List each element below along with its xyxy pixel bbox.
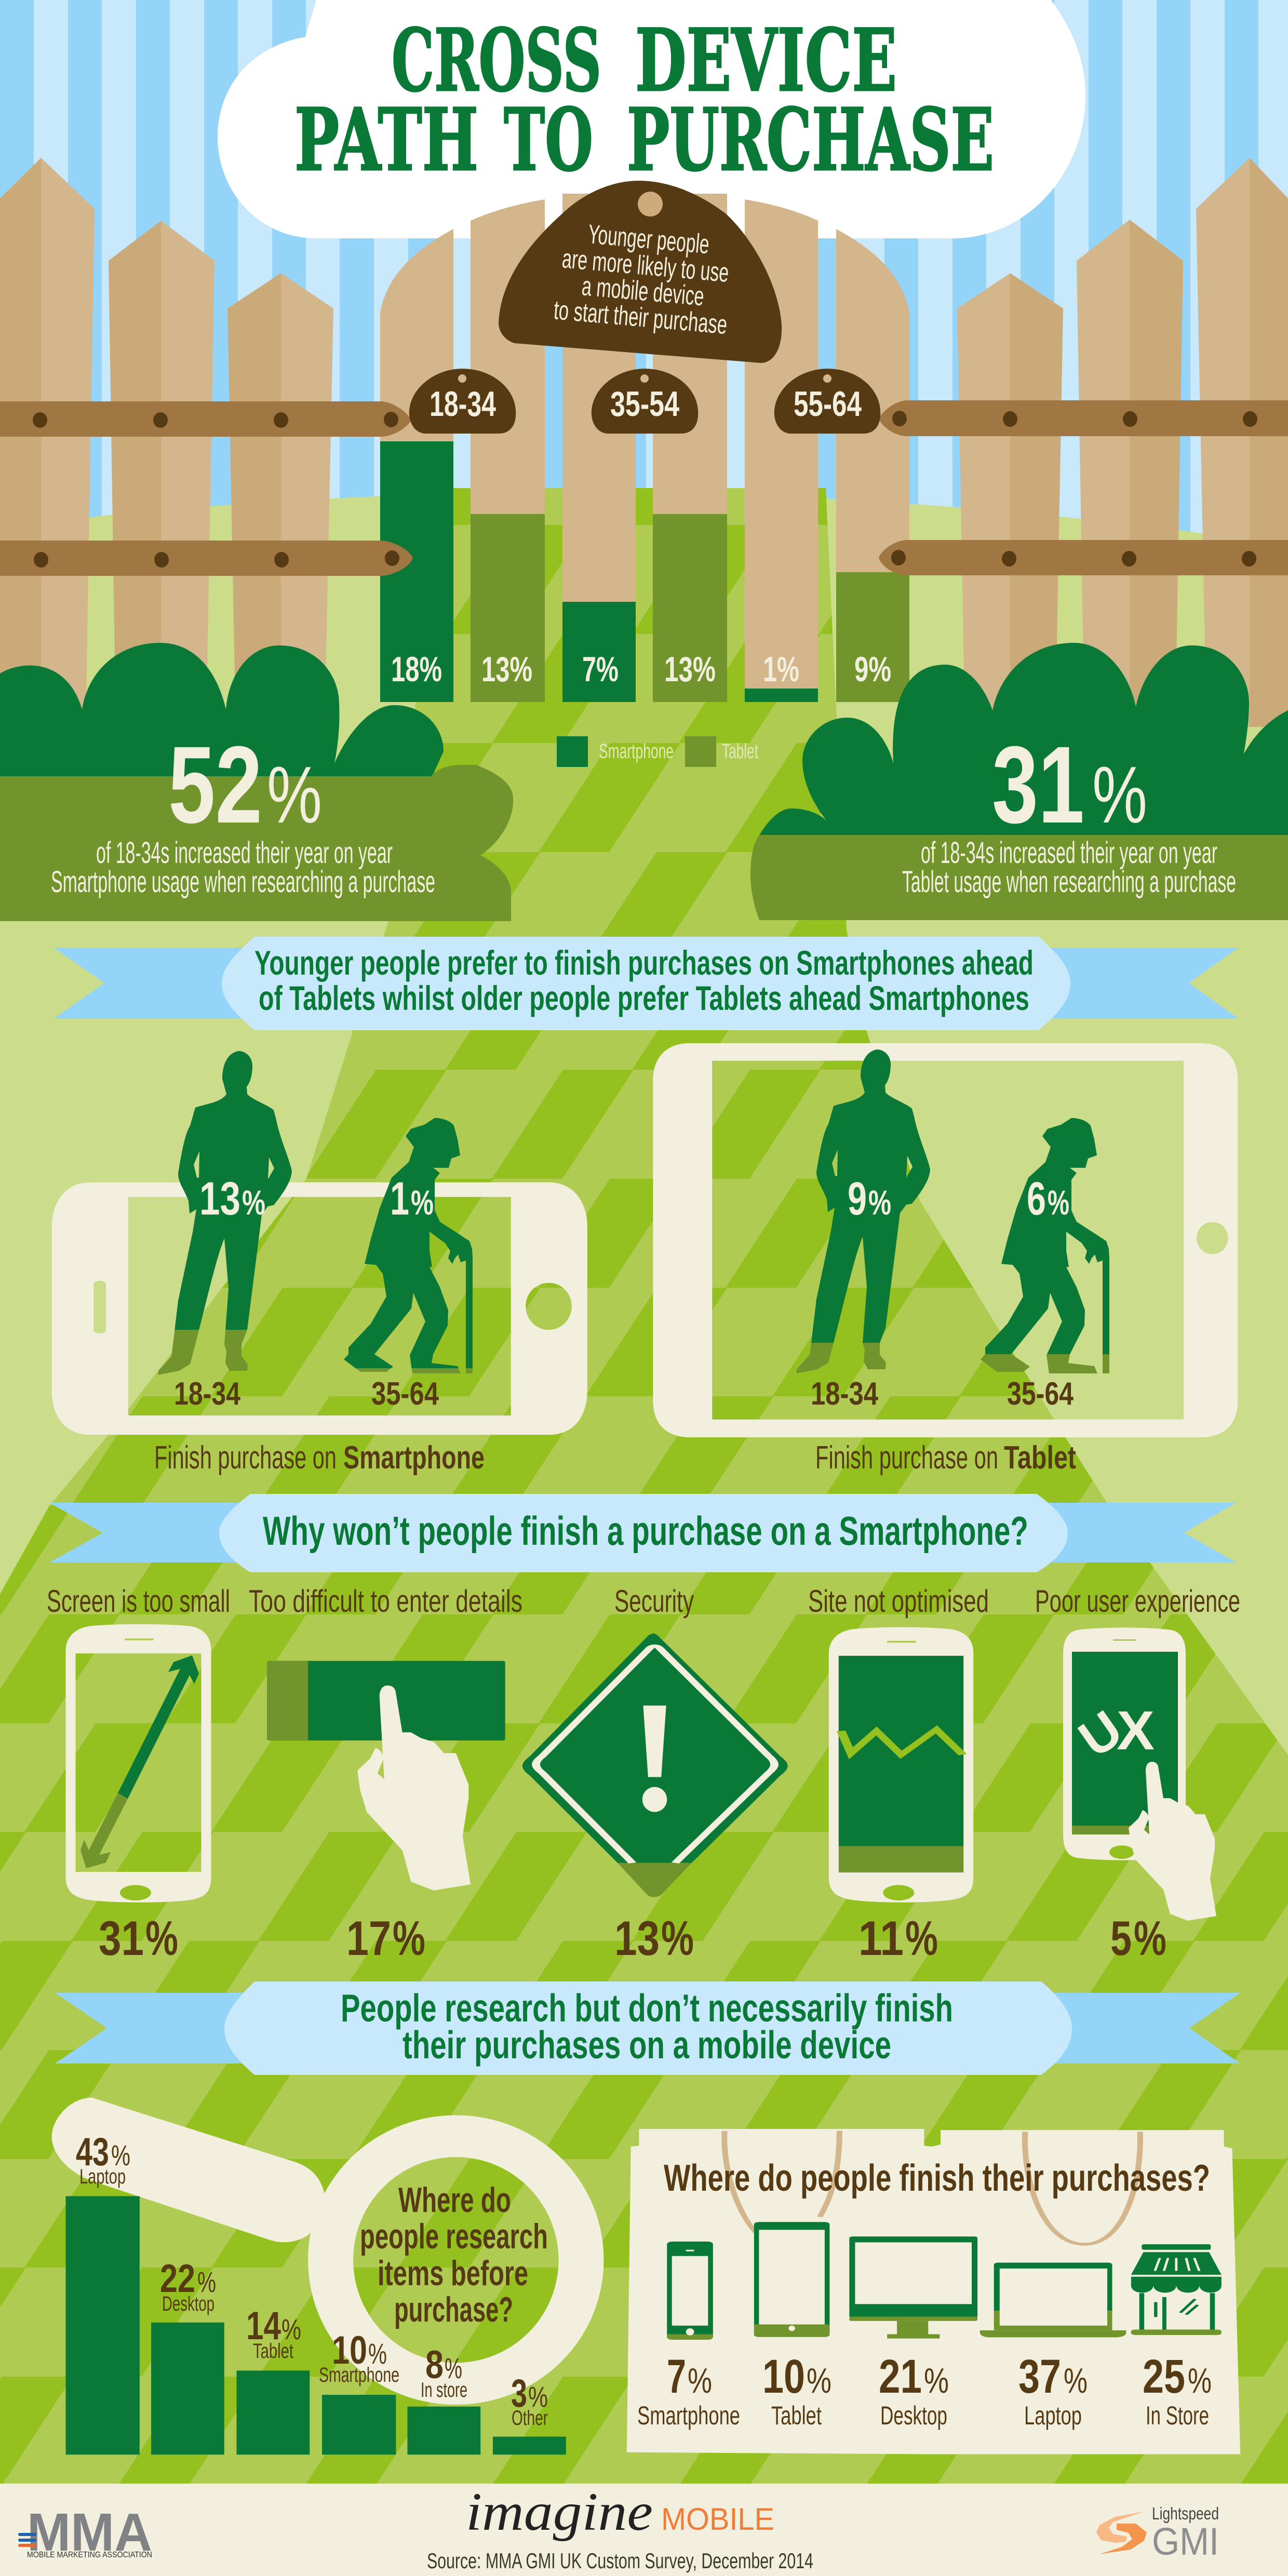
sign: younger people callout: Younger people [587,219,710,260]
reason percentages: % [905,1911,938,1965]
magnifying glass [52,2098,603,2405]
sign: younger people callout: are more likely to use [561,244,730,288]
reason percentages: % [1134,1911,1166,1965]
fence right pickets [957,158,1288,727]
title: PURCHASE [627,89,994,190]
icon: phone, site not optimised [829,1627,973,1903]
reason percentages [99,1911,1166,1965]
bar chart: research devices: Other [512,2407,548,2430]
left bush with 52% stat: 52 [168,723,262,846]
fence left pickets [0,158,333,727]
finish purchase percentages and labels: 25 [1143,2350,1185,2403]
finish purchase percentages and labels: % [807,2361,831,2400]
figure percentages and ages: 18-34 [811,1376,878,1412]
bar chart: research devices: 8 [425,2343,444,2387]
caption: finish on tablet: Finish purchase on [815,1440,998,1476]
sign: younger people callout: to start their purchase [553,295,729,340]
finish purchase percentages and labels: % [1188,2361,1212,2400]
shopping bag panel [627,2129,1240,2454]
icon: store [1131,2244,1222,2335]
figure percentages and ages: % [868,1183,891,1222]
age tag 18-34 [409,369,516,434]
icon: young man, smartphone [158,1051,292,1375]
right bush with 31% stat: 31 [992,723,1084,846]
magnifier question: Where do [398,2180,511,2220]
caption: finish on tablet: Tablet [1004,1440,1076,1476]
reason percentages: 17 [346,1911,391,1965]
figure percentages and ages: 13 [199,1173,240,1225]
finish purchase percentages and labels: 21 [879,2350,922,2403]
bar chart: research devices: % [111,2139,130,2172]
finish purchase percentages and labels: % [1064,2361,1088,2400]
bar chart: research devices: % [281,2313,301,2345]
bar chart: device by age: 9% [854,650,891,689]
reason labels: Security [614,1584,694,1619]
reason percentages: 31 [99,1911,144,1965]
figure percentages and ages: 18-34 [174,1376,240,1412]
logo: MMA: MMA [27,2502,152,2562]
finish purchase percentages and labels: 10 [762,2350,805,2403]
right bush with 31% stat [750,643,1288,920]
figure percentages and ages: 9 [848,1173,867,1225]
age tag 18-34: 18-34 [430,384,496,424]
reason percentages: 13 [614,1911,660,1965]
left bush with 52% stat: of 18-34s increased their year on year [96,836,393,870]
icon: security warning sign [522,1633,788,1897]
logo: imagine MOBILE [466,2482,774,2542]
finish purchase percentages and labels: % [924,2361,949,2400]
reason labels [47,1584,1240,1619]
reason percentages: 11 [858,1911,904,1965]
logo: Lightspeed GMI [1096,2504,1219,2563]
magnifier question: purchase? [394,2290,513,2329]
reason percentages: 5 [1110,1911,1132,1965]
title: TO [504,89,593,190]
icon: phone, screen too small [66,1624,211,1903]
figure percentages and ages: % [242,1183,265,1222]
magnifier question: people research [360,2217,548,2256]
reason percentages: % [393,1911,425,1965]
icon: smartphone [667,2242,713,2340]
finish purchase percentages and labels: Smartphone [637,2401,740,2430]
bar chart: device by age [380,441,909,702]
ribbon heading: younger people prefer: of Tablets whilst older people prefer Tablets ahead Smartphones [259,979,1029,1017]
left bush with 52% stat: % [267,750,322,840]
caption: finish on smartphone: Finish purchase on [154,1440,337,1476]
title cloud [218,0,1085,238]
bar chart: research devices: 3 [511,2371,527,2416]
ribbon heading: people research: People research but don’t necessarily finish [341,1986,953,2030]
ribbon heading: people research: their purchases on a mobile device [403,2023,891,2067]
sky stripes [0,0,1288,571]
finish purchase percentages and labels: In Store [1146,2401,1209,2430]
bar chart: research devices: % [368,2337,387,2370]
ribbon heading: younger people prefer [53,937,1239,1030]
smartphone frame, landscape [52,1182,587,1435]
gate pickets [380,194,909,702]
bar chart: device by age: 1% [763,650,799,689]
icon: phone with UX and hand: U [1068,1700,1133,1769]
logo: Lightspeed GMI: Lightspeed [1152,2504,1219,2523]
figure percentages and ages: % [411,1183,434,1222]
bar chart: research devices: % [528,2380,548,2413]
icon: laptop [980,2263,1126,2337]
finish purchase percentages and labels: Laptop [1024,2401,1082,2430]
icon: phone with UX and hand [1063,1627,1216,1921]
source text: Source: MMA GMI UK Custom Survey, December 2014 [427,2548,813,2573]
bar chart: research devices: 43 [76,2130,109,2174]
ribbon heading: why won't people finish: Why won’t people finish a purchase on a Smartphone? [263,1508,1028,1554]
bar chart: research devices: Laptop [79,2165,126,2188]
title [294,10,994,190]
finish purchase percentages and labels: Desktop [880,2401,947,2430]
title: CROSS [392,10,601,111]
finish purchase percentages and labels: 37 [1018,2350,1061,2403]
bar chart: device by age: 13% [481,650,532,689]
bar chart: research devices: % [197,2265,216,2298]
figure percentages and ages: 35-64 [1007,1376,1074,1412]
bar chart: research devices: In store [421,2379,467,2402]
title: PATH [294,89,478,190]
figure percentages and ages: 6 [1027,1173,1046,1225]
icon: desktop [849,2236,977,2339]
icon: young man, tablet [796,1049,930,1373]
figure percentages and ages: % [1048,1183,1069,1222]
legend [557,736,758,767]
age tag 55-64 [774,369,880,434]
logo: imagine MOBILE: MOBILE [661,2502,774,2537]
right bush with 31% stat: % [1092,750,1147,840]
figure percentages and ages: 35-64 [371,1376,439,1412]
figure percentages and ages: 1 [390,1173,409,1225]
sign: younger people callout: a mobile device [581,271,705,312]
magnifier question [360,2180,548,2329]
age tag 35-54: 35-54 [610,384,679,424]
icon: tablet [754,2222,829,2337]
bar chart: research devices [66,2130,566,2454]
reason labels: Too difficult to enter details [249,1584,522,1619]
legend: Smartphone [599,740,674,763]
age tag 35-54 [592,369,698,434]
left bush with 52% stat: Smartphone usage when researching a purchase [51,865,435,899]
bar chart: device by age: 13% [664,650,716,689]
age tag 55-64: 55-64 [794,384,862,424]
reason labels: Screen is too small [47,1584,230,1619]
bar chart: research devices: 22 [160,2257,195,2301]
bar chart: research devices: 10 [332,2328,367,2372]
reason percentages: % [145,1911,178,1965]
bar chart: research devices: % [445,2352,462,2384]
fence rails with nails [0,400,1288,576]
ribbon heading: why won't people finish [49,1494,1236,1572]
icon: phone with UX and hand: X [1117,1700,1155,1761]
icon: older woman, smartphone [344,1118,473,1373]
logo: imagine MOBILE: imagine [466,2482,653,2542]
bar chart: research devices: Tablet [253,2340,293,2363]
magnifier question: items before [378,2254,528,2293]
caption: finish on smartphone: Smartphone [343,1440,485,1476]
bar chart: device by age: 7% [582,650,619,689]
finish purchase percentages and labels: Tablet [771,2401,822,2430]
bar chart: research devices: Desktop [162,2292,214,2315]
reason percentages: % [661,1911,694,1965]
finish purchase percentages and labels: % [688,2361,712,2400]
left bush with 52% stat [0,643,513,921]
ribbon heading: people research [55,1981,1240,2075]
icon: card and hand [267,1661,505,1891]
title: DEVICE [635,10,897,111]
legend: Tablet [722,740,758,763]
logo: MMA: MOBILE MARKETING ASSOCIATION [27,2551,152,2559]
bar chart: device by age: 18% [391,650,442,689]
footer band [0,2484,1288,2576]
tablet frame [653,1043,1238,1437]
reason labels: Site not optimised [808,1584,989,1619]
logo: Lightspeed GMI: GMI [1152,2520,1219,2563]
finish purchase percentages and labels [637,2350,1212,2430]
bar chart: research devices: Smartphone [319,2364,399,2386]
icon: older woman, tablet [981,1118,1109,1373]
bar chart: research devices: 14 [246,2304,281,2348]
finish purchase percentages and labels: 7 [667,2350,686,2403]
sign: younger people callout [499,181,782,363]
figure percentages and ages [174,1173,1074,1412]
